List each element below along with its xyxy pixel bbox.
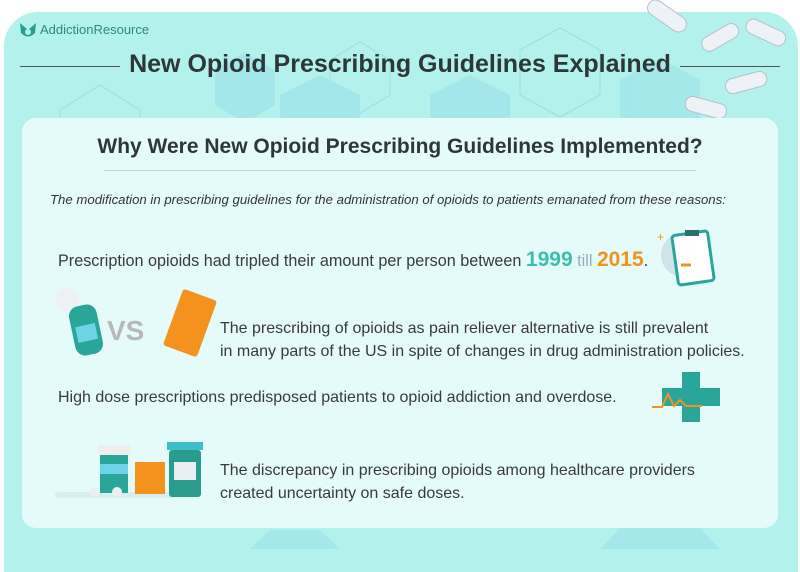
reason 3: High dose prescriptions predisposed patients to opioid addiction and overdose.: [58, 389, 617, 406]
reason 1: Prescription opioids had tripled their amount per person between 1999 till 2015.: [58, 248, 648, 271]
decorative pills: [647, 0, 786, 118]
icon: clipboard: +: [657, 230, 664, 244]
icon: bottles and pills: [55, 442, 203, 498]
reason 2: in many parts of the US in spite of changes in drug administration policies.: [220, 343, 745, 360]
subtitle: Why Were New Opioid Prescribing Guidelines Implemented?: [97, 135, 703, 158]
logo: AddictionResource: [40, 22, 149, 37]
reason 2: The prescribing of opioids as pain reliever alternative is still prevalent: [220, 320, 708, 337]
reason 4: created uncertainty on safe doses.: [220, 485, 465, 502]
icon: bottle vs blister: [55, 288, 216, 356]
icon: medical cross: [652, 372, 720, 422]
reason 2: [220, 320, 745, 360]
icon: bottle vs blister: VS: [107, 315, 144, 346]
reason 4: The discrepancy in prescribing opioids among healthcare providers: [220, 462, 695, 479]
icon: clipboard: [657, 230, 716, 286]
reason 4: [220, 462, 695, 502]
intro text: The modification in prescribing guidelines for the administration of opioids to patients emanated from these reasons:: [50, 192, 726, 207]
title: New Opioid Prescribing Guidelines Explained: [129, 50, 671, 78]
inner panel: [22, 118, 778, 528]
